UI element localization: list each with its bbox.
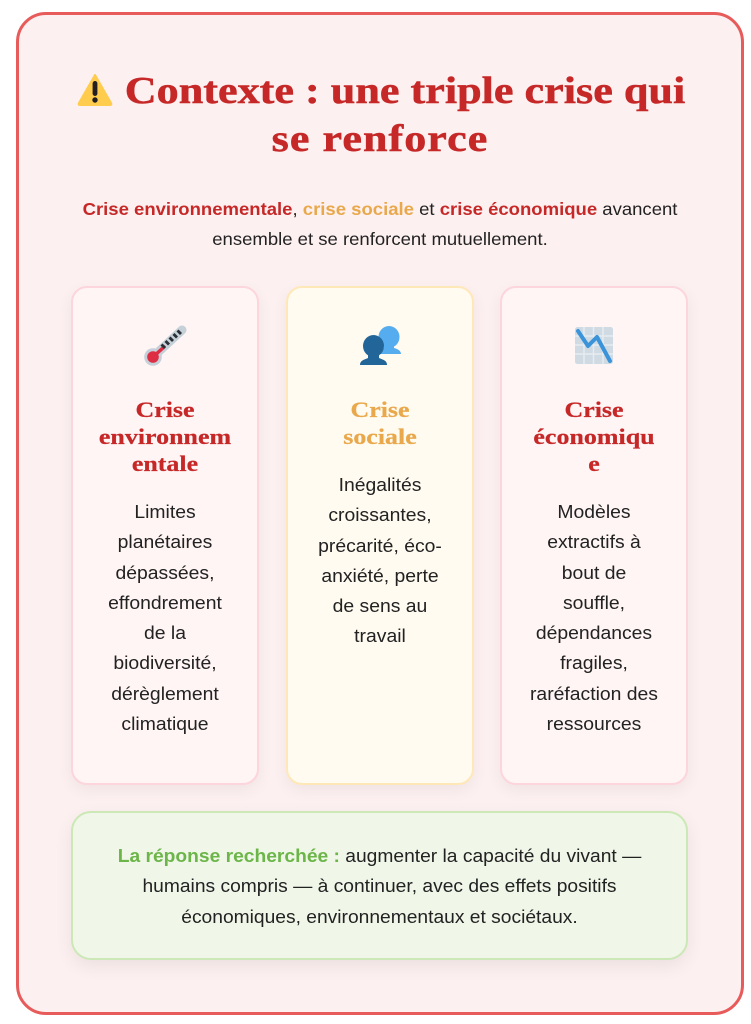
- callout text: humains compris — à continuer, avec des effets positifs: [142, 876, 617, 896]
- description: Modèles: [557, 502, 631, 522]
- description: [108, 502, 222, 734]
- description: bout de: [562, 563, 626, 583]
- description: de la: [144, 623, 186, 643]
- description: dépassées,: [115, 563, 214, 583]
- heading: [343, 397, 417, 449]
- panel: crise sociale: [286, 286, 474, 785]
- description: précarité, éco-: [318, 536, 442, 556]
- description: effondrement: [108, 593, 222, 613]
- description: [318, 475, 442, 646]
- description: anxiété, perte: [321, 566, 439, 586]
- description: Limites: [134, 502, 196, 522]
- description: Inégalités: [339, 475, 421, 495]
- description: ressources: [547, 714, 641, 734]
- description: travail: [354, 626, 406, 646]
- heading: sociale: [343, 424, 417, 449]
- heading: Crise: [564, 397, 624, 422]
- description: raréfaction des: [530, 684, 658, 704]
- intro text: Crise environnementale, crise sociale et crise économique avancent: [83, 199, 677, 219]
- title line two: se renforce: [272, 118, 488, 160]
- icon: people: [360, 326, 401, 365]
- heading: e: [588, 451, 600, 476]
- description: dérèglement: [111, 684, 219, 704]
- heading: entale: [132, 451, 198, 476]
- intro text: ensemble et se renforcent mutuellement.: [212, 229, 548, 249]
- description: croissantes,: [328, 505, 432, 525]
- heading: [99, 397, 231, 476]
- description: planétaires: [118, 532, 212, 552]
- icon: warning: [78, 74, 112, 106]
- icon: falling chart: [575, 327, 613, 364]
- description: fragiles,: [560, 653, 628, 673]
- description: climatique: [121, 714, 209, 734]
- icon: thermometer: [144, 326, 186, 366]
- description: souffle,: [563, 593, 625, 613]
- heading: [533, 397, 655, 476]
- heading: économiqu: [533, 424, 655, 449]
- callout text: économiques, environnementaux et sociétaux.: [181, 907, 578, 927]
- callout text: [118, 846, 642, 927]
- heading: Crise: [135, 397, 195, 422]
- description: de sens au: [333, 596, 427, 616]
- description: [530, 502, 658, 734]
- heading: environnem: [99, 424, 231, 449]
- panel: crise environnementale: [71, 286, 259, 785]
- heading: Crise: [350, 397, 410, 422]
- callout: la reponse recherchee: [71, 811, 688, 960]
- description: extractifs à: [547, 532, 641, 552]
- title line one: Contexte : une triple crise qui: [125, 70, 685, 112]
- title: [78, 70, 685, 160]
- intro text: [83, 199, 678, 249]
- callout text: La réponse recherchée : augmenter la capacité du vivant —: [118, 846, 641, 866]
- panel: crise economique: [500, 286, 688, 785]
- description: dépendances: [536, 623, 652, 643]
- description: biodiversité,: [113, 653, 217, 673]
